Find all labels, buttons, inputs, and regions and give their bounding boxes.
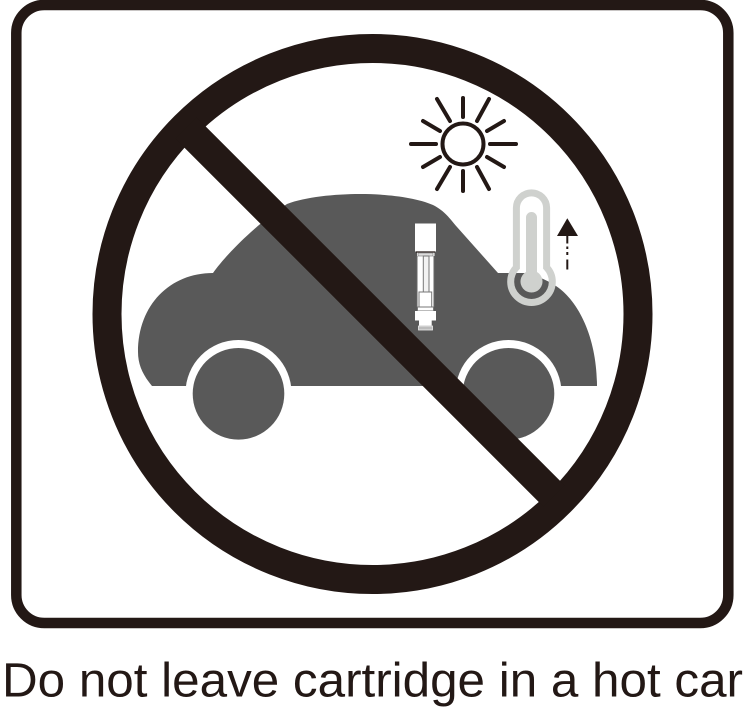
- front wheel: [186, 340, 292, 446]
- prohibition slash: [186, 128, 554, 496]
- car body: [138, 194, 597, 386]
- prohibition circle: [107, 48, 638, 580]
- rear wheel: [456, 340, 562, 446]
- caption: Do not leave cartridge in a hot car: [2, 654, 743, 708]
- icon: thermometer: [511, 193, 552, 303]
- icon: sun: [411, 98, 516, 191]
- icon: rising temperature arrow: [557, 218, 578, 270]
- icon: car: [138, 194, 597, 446]
- icon: cartridge: [415, 224, 436, 330]
